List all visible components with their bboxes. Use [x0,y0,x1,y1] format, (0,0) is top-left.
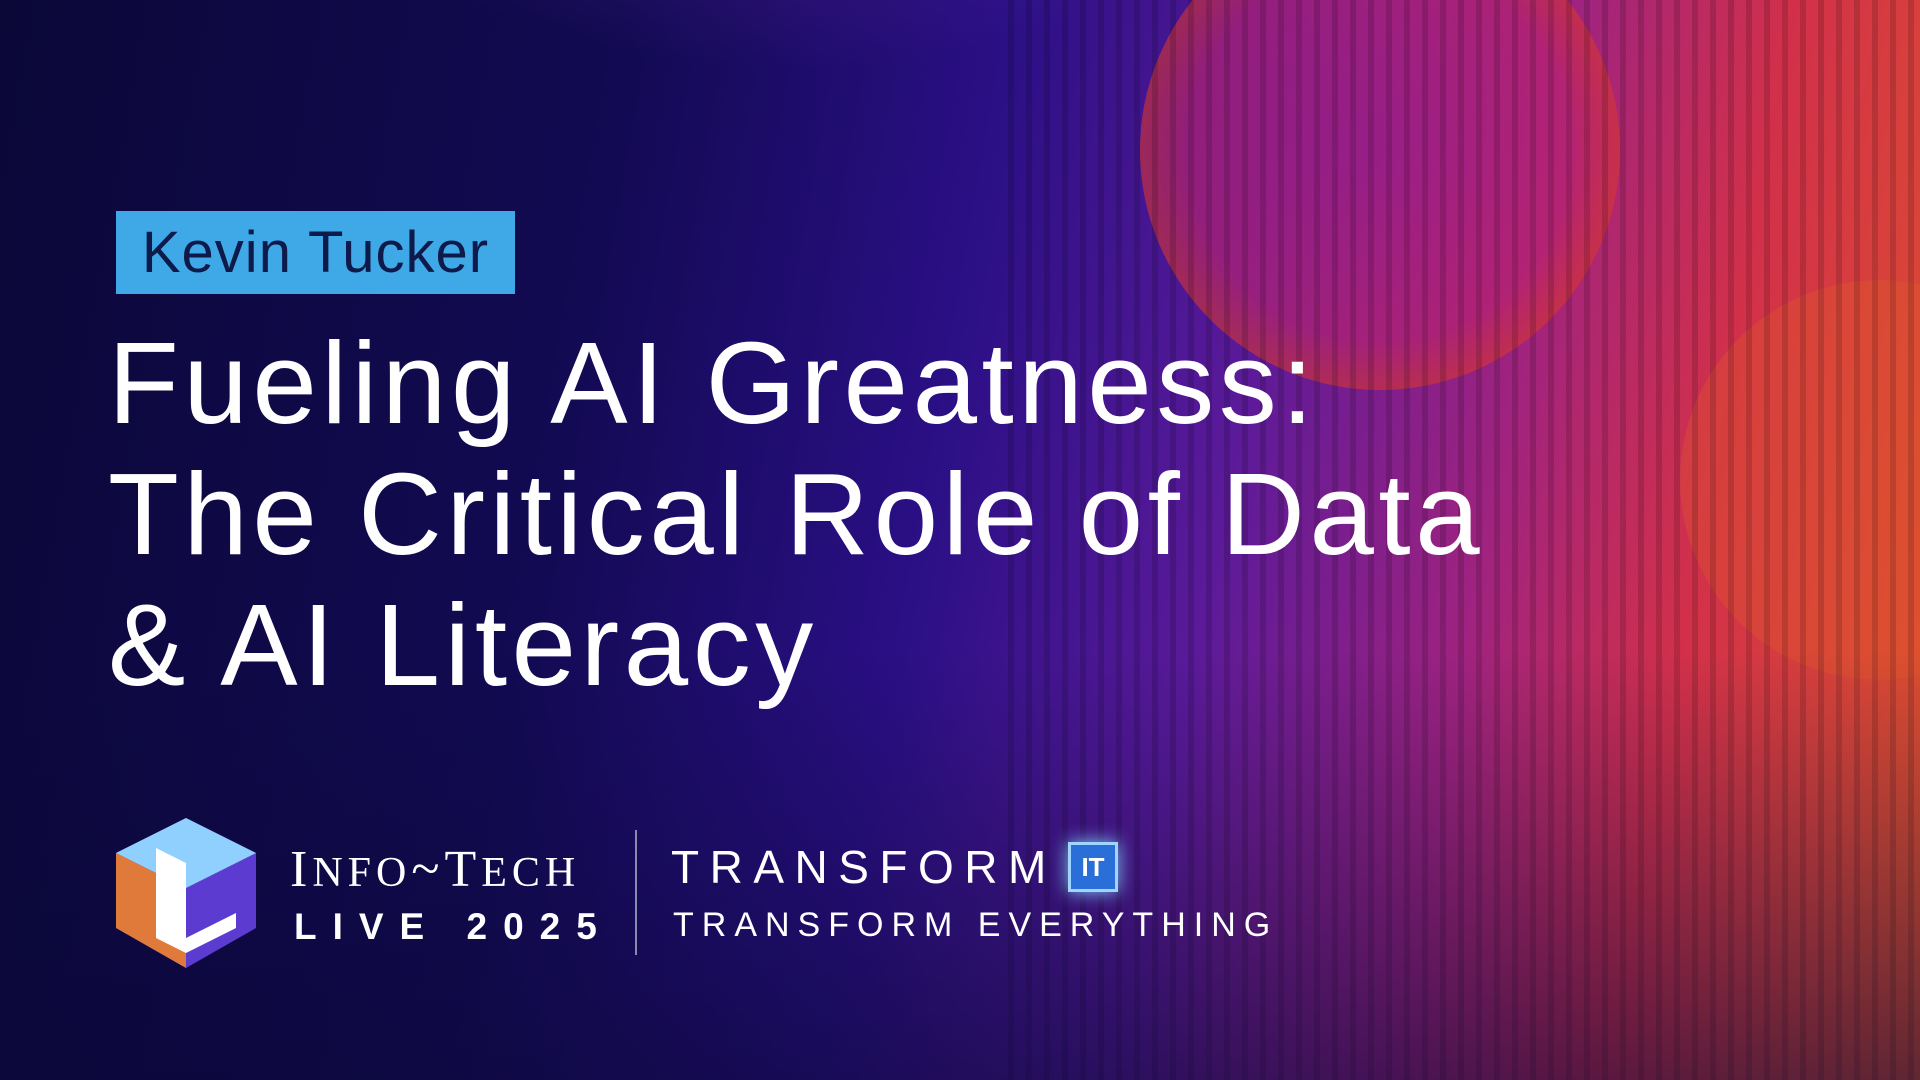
divider [635,830,637,955]
text: LIVE 2025: LIVE 2025 [294,906,613,947]
icon: IT badge: IT [1081,852,1105,882]
title: & AI Literacy [108,580,818,710]
logo: Info-Tech Live 2025 [116,818,613,968]
logo: Transform IT: TRANSFORM EVERYTHING [673,906,1278,944]
speaker name tag: Kevin Tucker [142,220,489,285]
logo: Transform IT: TRANSFORM [671,841,1057,893]
title [108,318,1484,710]
icon: IT badge [1068,842,1118,892]
text: INFO~TECH: INFO~TECH [290,841,580,898]
speaker name tag [116,211,515,294]
icon: cube L [116,818,256,968]
title: The Critical Role of Data [108,449,1484,579]
title: Fueling AI Greatness: [108,318,1318,448]
logo: Transform IT [671,828,1278,944]
